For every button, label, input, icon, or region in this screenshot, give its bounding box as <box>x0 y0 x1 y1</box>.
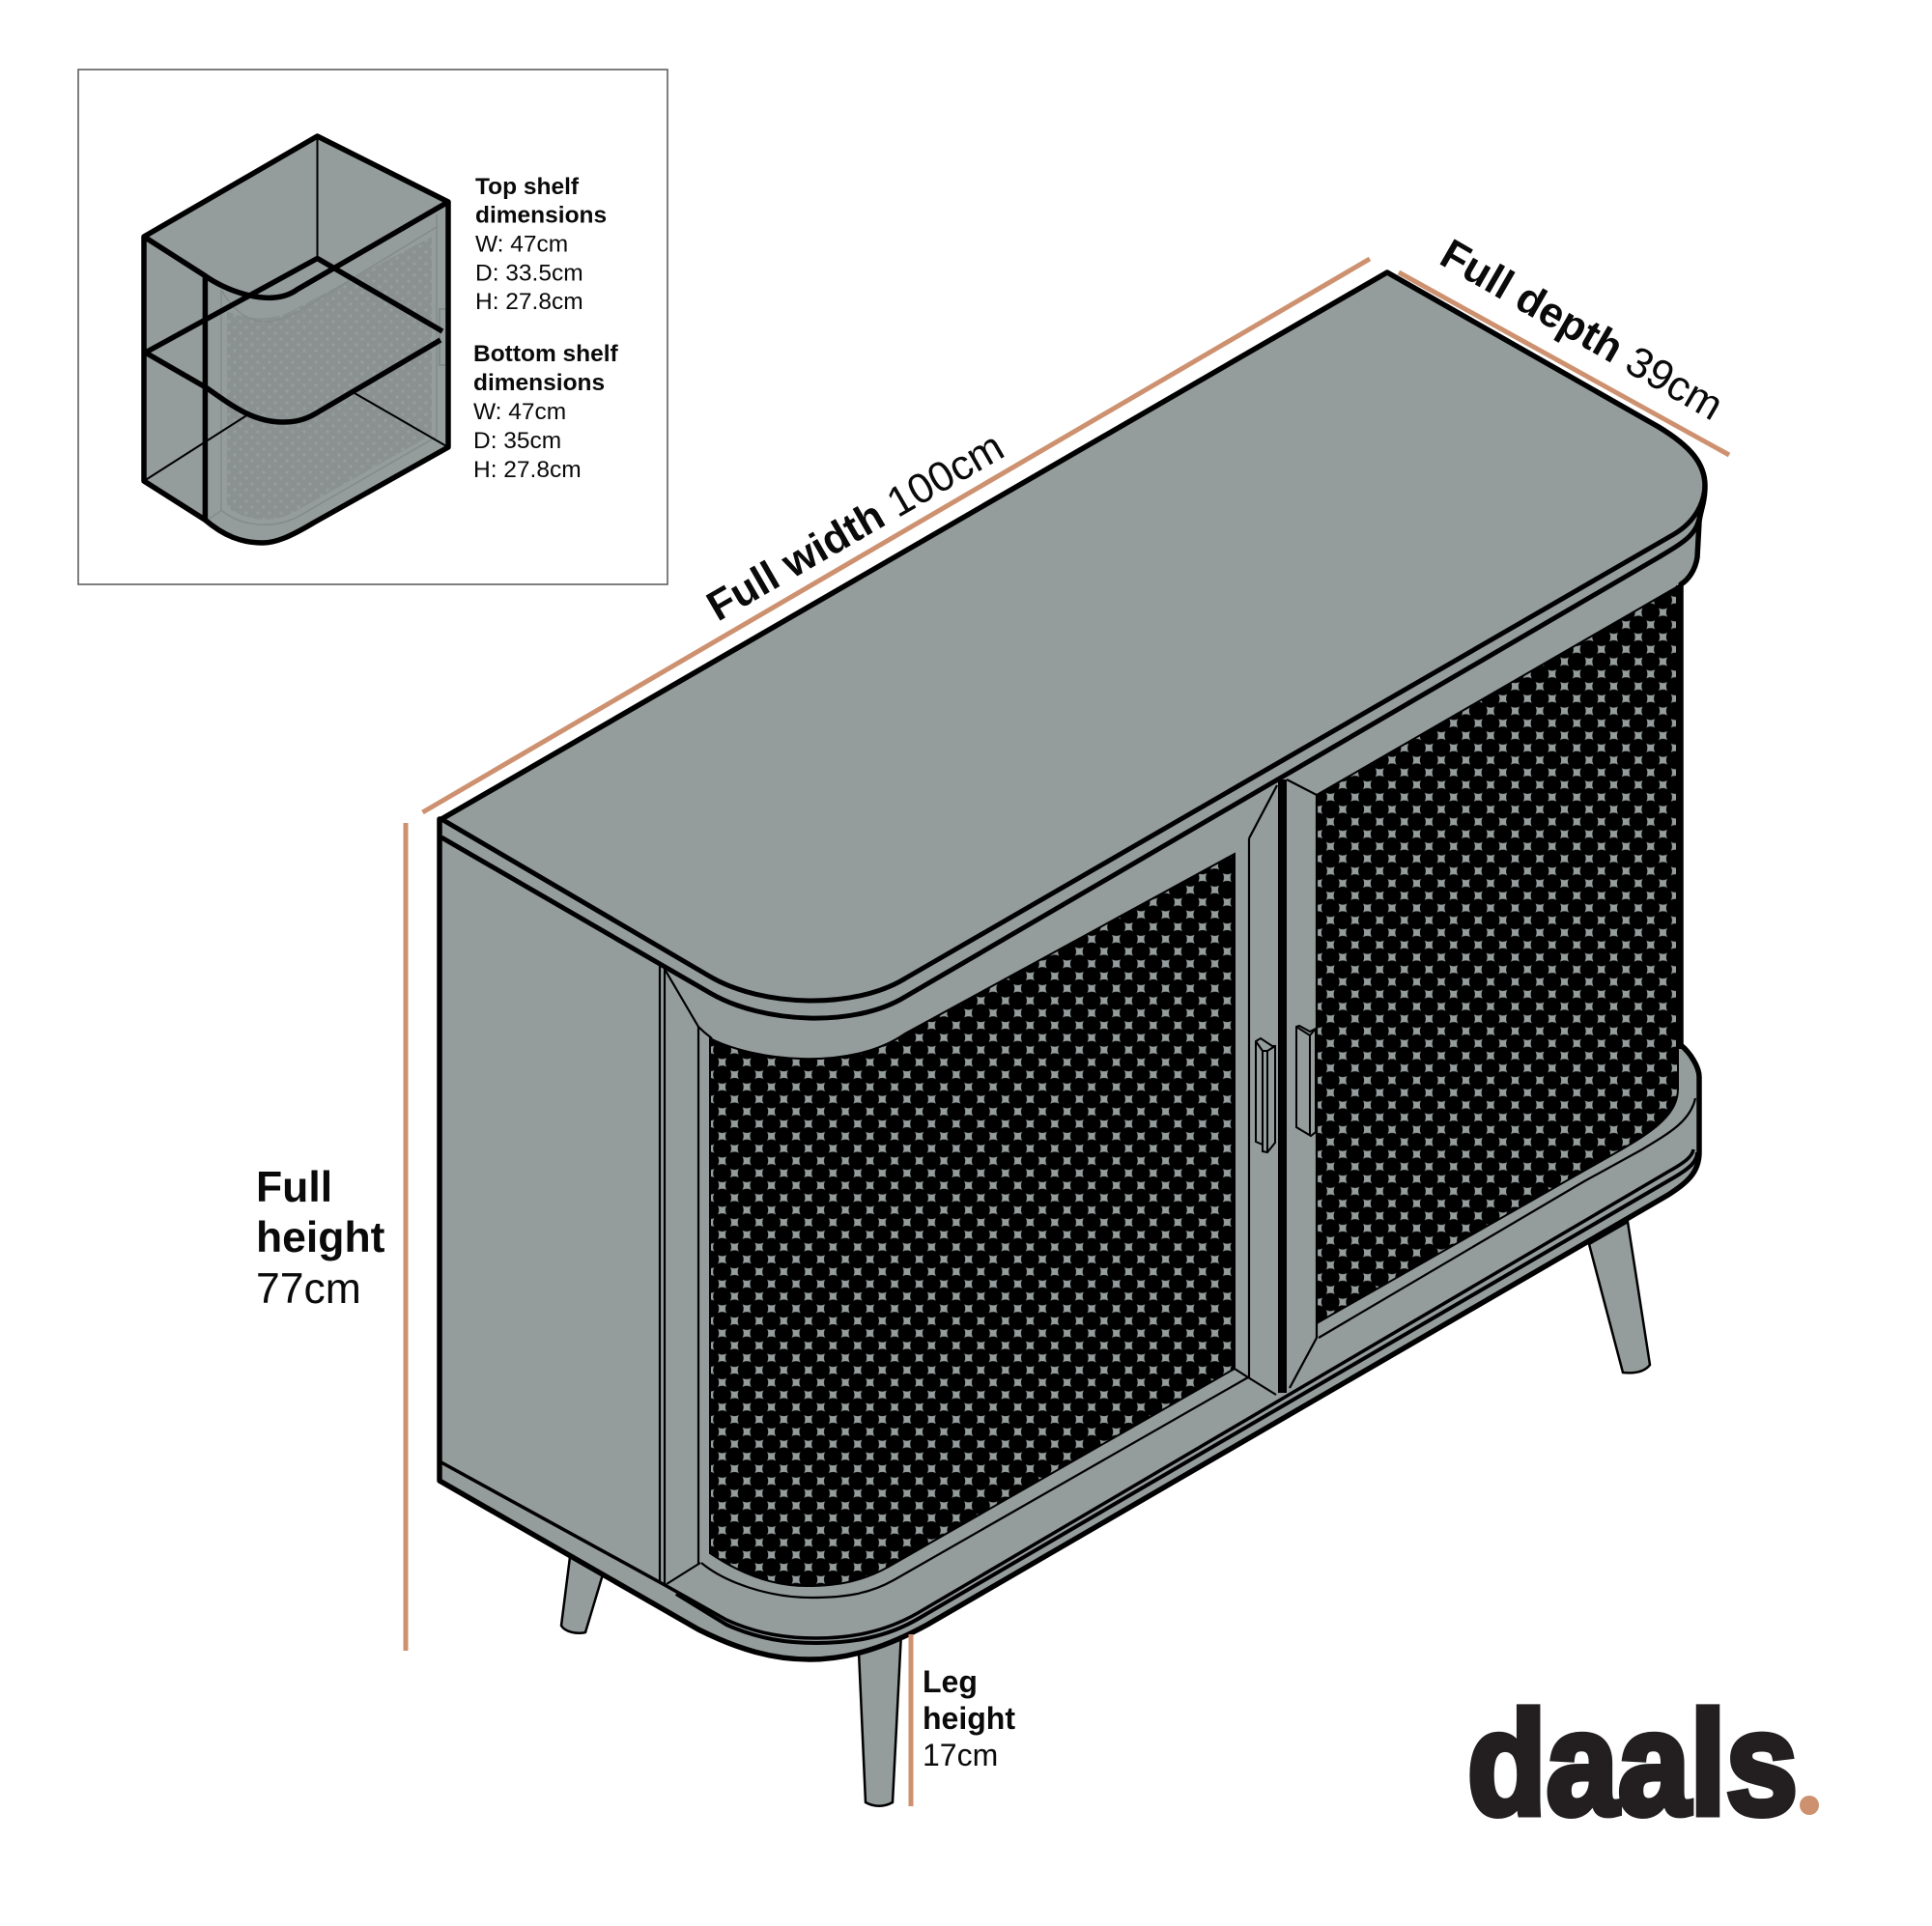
faded door behind shelves <box>208 214 446 524</box>
text: top shelf dimensions: H: 27.8cm <box>475 289 583 315</box>
thin inner edges <box>144 136 448 481</box>
label: full depth: Full depth 39cm <box>1433 230 1731 430</box>
text: bottom shelf dimensions: H: 27.8cm <box>473 457 582 483</box>
dimension line: full depth <box>1399 272 1729 455</box>
right door handle <box>1296 1026 1316 1136</box>
right door mesh panel <box>1317 586 1682 1323</box>
left door mesh panel <box>710 854 1235 1586</box>
front leg <box>859 1632 901 1806</box>
left door handle <box>1256 1038 1275 1152</box>
logo: daals: daals <box>1467 1682 1798 1846</box>
label: leg height: Leg <box>923 1664 978 1699</box>
rear left leg <box>561 1557 603 1633</box>
text: top shelf dimensions: Top shelf <box>475 174 580 200</box>
text: bottom shelf dimensions: W: 47cm <box>473 399 566 425</box>
text: bottom shelf dimensions: dimensions <box>473 370 605 396</box>
central door gap <box>1278 779 1287 1393</box>
dimension line: full width <box>423 259 1370 812</box>
label: full height: height <box>256 1214 385 1261</box>
right door frame lines <box>1287 779 1695 1388</box>
label: full height: Full <box>256 1164 332 1211</box>
dimension line: leg height <box>908 1634 914 1806</box>
label: leg height: height <box>923 1701 1015 1736</box>
label: full width: Full width 100cm <box>699 423 1011 631</box>
thick outer edges and shelves <box>144 136 448 543</box>
left door frame lines <box>660 785 1277 1598</box>
text: top shelf dimensions: dimensions <box>475 203 607 228</box>
rear right leg <box>1589 1222 1650 1373</box>
label: full height: 77cm <box>256 1265 361 1313</box>
dimension line: full height <box>404 823 408 1651</box>
cabinet body <box>440 272 1705 1659</box>
text: top shelf dimensions: D: 33.5cm <box>475 261 583 286</box>
tabletop front edge <box>441 483 1705 1001</box>
sideboard illustration <box>440 272 1705 1806</box>
plinth edge lines <box>440 1149 1693 1638</box>
text: bottom shelf dimensions: D: 35cm <box>473 428 561 454</box>
text: bottom shelf dimensions: Bottom shelf <box>473 341 619 367</box>
text: top shelf dimensions: W: 47cm <box>475 232 568 257</box>
inset cabinet drawing <box>144 136 448 543</box>
tabletop lower edge <box>441 512 1700 1018</box>
label: leg height: 17cm <box>923 1738 998 1772</box>
panel: interior shelf inset <box>78 70 668 584</box>
